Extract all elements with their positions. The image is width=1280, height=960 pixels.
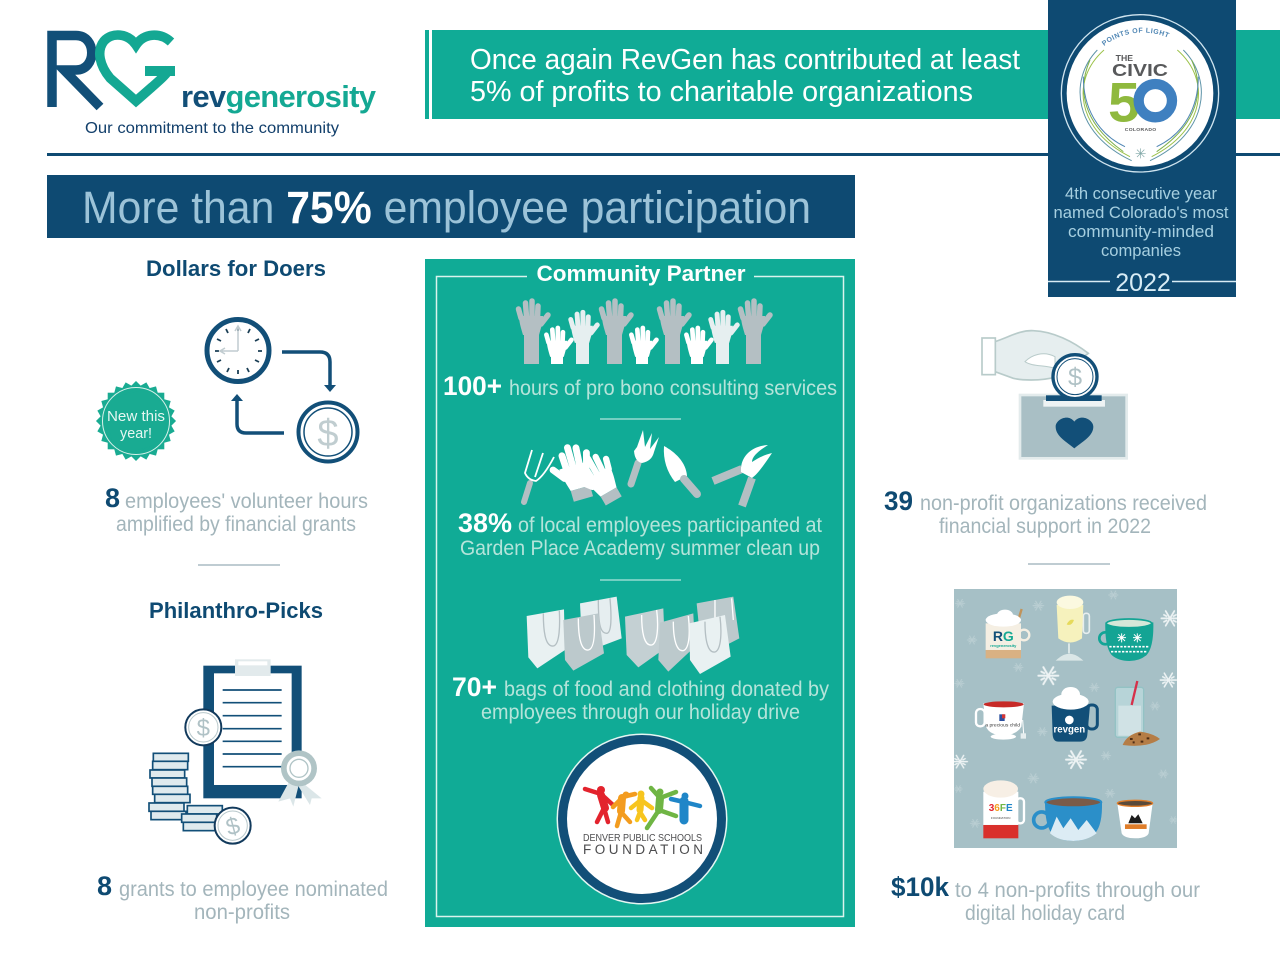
rosette (278, 750, 322, 807)
stat text: bags of food and clothing donated by (504, 678, 829, 701)
mug: revgenerosity: revgenerosity (990, 643, 1017, 648)
award text: community-minded (1068, 222, 1214, 241)
panel frame (436, 276, 844, 916)
coin stack (149, 753, 222, 831)
logo tagline: Our commitment to the community (85, 120, 339, 137)
logo mark R (52, 36, 100, 107)
stat number: 8 (105, 483, 120, 513)
panel: civic 50 award (1048, 0, 1236, 297)
gloves (548, 443, 626, 511)
civic 50 badge: 5 (1108, 70, 1140, 133)
card background (954, 589, 1177, 848)
civic 50 badge: CIVIC (1112, 60, 1168, 80)
civic 50 badge: POINTS OF LIGHT (1102, 28, 1170, 46)
heading: philanthro-picks: Philanthro-Picks (149, 598, 323, 623)
award text: 4th consecutive year (1065, 184, 1217, 203)
stat text: amplified by financial grants (116, 513, 356, 536)
stat text: non-profit organizations received (920, 492, 1207, 515)
stat: 70+ bags (452, 672, 829, 724)
top banner (425, 30, 1280, 119)
clipboard (203, 659, 302, 798)
logo: revgenerosity (52, 35, 377, 137)
award text: companies (1101, 241, 1181, 260)
coin on clipboard: $ (197, 715, 210, 742)
mug: revgenerosity (986, 609, 1029, 658)
stat text: employees through our holiday drive (481, 701, 800, 724)
header rule (47, 153, 1280, 156)
stat: 38% (458, 508, 822, 560)
stat number: 38% (458, 508, 512, 538)
stat text: of local employees participanted at (518, 514, 822, 537)
stat text: grants to employee nominated (119, 878, 388, 901)
mug: dps foundation: FOUNDATION (991, 816, 1010, 820)
heart (1056, 418, 1093, 448)
icon: hand dropping coin in box (982, 331, 1127, 458)
coin (1053, 355, 1097, 399)
arrow: clock to coin (282, 352, 336, 392)
clock (207, 320, 269, 382)
logo wordmark: revgenerosity (181, 79, 377, 114)
icon: shopping bags (527, 597, 739, 674)
mug: a precious child (976, 701, 1026, 740)
civic 50 badge: COLORADO (1125, 127, 1157, 133)
card artwork (953, 591, 1179, 841)
coin on clipboard (185, 709, 221, 745)
stat text: to 4 non-profits through our (955, 879, 1200, 902)
milk and cookie (1115, 681, 1160, 746)
mug: teal sweater (1099, 619, 1153, 661)
coin: $ (1068, 364, 1082, 392)
panel background (425, 259, 855, 927)
stat number: 39 (884, 486, 913, 516)
mug: dps foundation: 36FE (989, 803, 1013, 814)
stat number: 8 (97, 871, 112, 901)
arrow: coin to clock (231, 394, 284, 433)
logo mark heart G (100, 35, 175, 101)
coin: $ (317, 413, 339, 455)
civic 50 badge (1060, 14, 1220, 173)
pruners (713, 445, 772, 506)
stat text: financial support in 2022 (939, 515, 1151, 538)
logo circle (556, 734, 728, 904)
stat number: $10k (891, 872, 950, 902)
panel heading: Community Partner (536, 261, 746, 286)
mug: a precious child: a precious child (985, 723, 1020, 729)
fork (631, 430, 659, 484)
icon: clipboard with coins (149, 659, 322, 844)
donation box (1020, 395, 1127, 458)
award text: named Colorado's most (1054, 203, 1229, 222)
coin on stack (215, 808, 251, 844)
stat text: employees' volunteer hours (125, 490, 368, 513)
hand rake (524, 450, 554, 502)
award year: 2022 (1115, 269, 1171, 297)
stat text: hours of pro bono consulting services (509, 377, 837, 400)
badge text: year! (120, 425, 152, 442)
digital holiday card (953, 589, 1179, 848)
mug: eggnog glass (1057, 596, 1089, 660)
stat text: digital holiday card (965, 902, 1125, 925)
award column (1048, 0, 1236, 297)
heading banner (47, 175, 855, 238)
coin (298, 402, 358, 462)
foundation name: DENVER PUBLIC SCHOOLS (583, 832, 702, 844)
panel: community partner (425, 259, 855, 927)
stat: 100+ hours (443, 371, 837, 401)
civic 50 badge: THE (1116, 53, 1133, 63)
icon: garden tools (524, 430, 772, 511)
trowel (664, 446, 697, 494)
mug: revgen: revgen (1053, 725, 1085, 736)
mug: white with orange rim (1117, 800, 1153, 838)
heading background (47, 175, 855, 238)
banner bar (425, 30, 1280, 119)
snowflakes (953, 591, 1179, 827)
icon: clock and money cycle (207, 320, 358, 462)
giving hand (982, 331, 1088, 380)
jumping figures (585, 786, 700, 828)
foundation name: FOUNDATION (583, 842, 703, 857)
banner text: 5% of profits to charitable organizations (470, 76, 973, 108)
heading: dollars for doers: Dollars for Doers (146, 256, 326, 281)
denver public schools foundation logo (556, 734, 728, 904)
banner text: Once again RevGen has contributed at least (470, 44, 1020, 76)
stat number: 100+ (443, 371, 502, 401)
stat: 8 employees (105, 483, 368, 536)
coin on stack: $ (223, 812, 243, 842)
main heading: More than 75% employee participation (82, 182, 811, 233)
badge: new this year (96, 381, 176, 461)
stat number: 70+ (452, 672, 497, 702)
stat text: non-profits (194, 901, 290, 924)
stat: 39 non-profits (884, 486, 1207, 538)
mug: blue winter (1034, 797, 1102, 841)
stat: $10k (891, 872, 1200, 925)
mug: dps foundation (983, 780, 1024, 838)
icon: raised hands (518, 301, 770, 364)
stat: 8 grants (97, 871, 388, 924)
stat text: Garden Place Academy summer clean up (460, 537, 820, 560)
starburst (96, 381, 176, 461)
mug: revgenerosity: RG (993, 628, 1014, 644)
mug: revgen (1052, 687, 1097, 742)
badge text: New this (107, 408, 165, 425)
